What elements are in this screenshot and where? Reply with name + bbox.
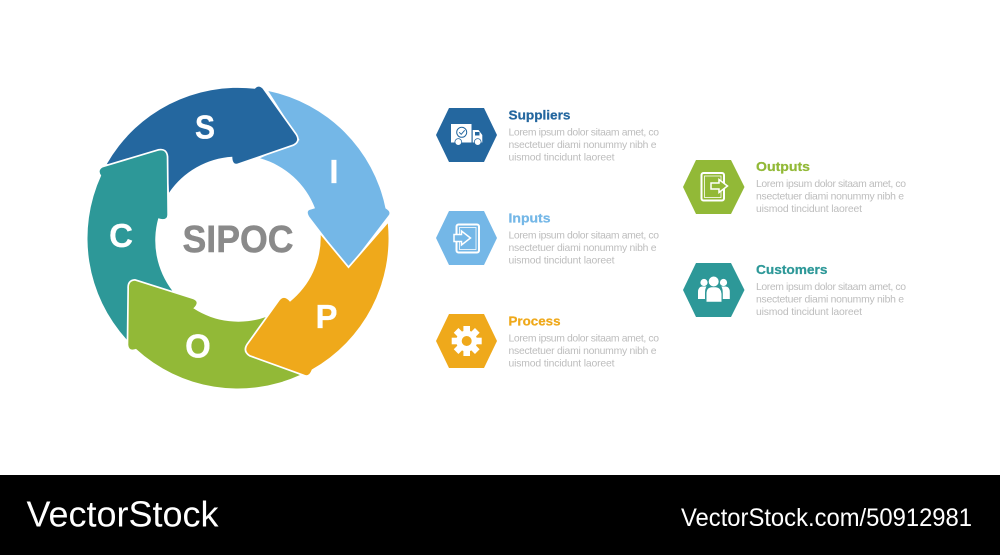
- arrow segment: Customers: [87, 150, 172, 340]
- body text: Lorem ipsum dolor sitaam amet, co: [508, 230, 659, 242]
- heading: Suppliers: Suppliers: [508, 107, 570, 122]
- body text: Lorem ipsum dolor sitaam amet, co: [756, 179, 906, 190]
- heading: Inputs: Inputs: [508, 210, 550, 226]
- letter I: I: [329, 153, 339, 190]
- icon: truck hexagon: [436, 108, 497, 162]
- body text: Lorem ipsum dolor sitaam amet, co: [756, 282, 906, 293]
- SIPOC cycle diagram: [87, 87, 390, 388]
- body text: uismod tincidunt laoreet: [508, 358, 615, 370]
- arrow segment: Inputs: [260, 91, 390, 266]
- arrow segment: Suppliers: [107, 87, 297, 193]
- icon: enter door hexagon: [436, 211, 497, 265]
- body text: uismod tincidunt laoreet: [508, 152, 615, 164]
- icon: gear hexagon: [436, 314, 497, 368]
- body text: uismod tincidunt laoreet: [756, 307, 862, 318]
- body text: Lorem ipsum dolor sitaam amet, co: [508, 128, 659, 138]
- arrow segment: Process: [246, 223, 389, 375]
- letter P: P: [315, 298, 338, 335]
- body text: nsectetuer diami nonummy nibh e: [508, 140, 657, 151]
- letter S: S: [195, 108, 215, 146]
- item: Inputs: [436, 210, 659, 266]
- body text: nsectetuer diami nonummy nibh e: [508, 243, 657, 254]
- heading: Process: Process: [508, 314, 560, 328]
- body text: uismod tincidunt laoreet: [508, 256, 615, 266]
- icon: exit door hexagon: [683, 160, 744, 214]
- letter C: C: [109, 217, 133, 254]
- arrow segment: Outputs: [128, 281, 300, 388]
- footer url text: VectorStock.com/50912981: [681, 504, 972, 532]
- letter O: O: [185, 328, 211, 364]
- heading: Outputs: Outputs: [756, 159, 810, 174]
- footer logo text: VectorStock: [26, 494, 219, 534]
- item: Outputs: [683, 159, 906, 215]
- body text: nsectetuer diami nonummy nibh e: [756, 294, 904, 306]
- body text: uismod tincidunt laoreet: [756, 204, 862, 215]
- heading: Customers: Customers: [756, 262, 828, 277]
- icon: people hexagon: [683, 263, 744, 317]
- item: Customers: [683, 262, 906, 318]
- footer bar: [0, 475, 1000, 555]
- body text: nsectetuer diami nonummy nibh e: [508, 346, 657, 357]
- item: Process: [436, 314, 659, 370]
- center title: SIPOC: [182, 219, 294, 261]
- item: Suppliers: [436, 107, 659, 164]
- body text: Lorem ipsum dolor sitaam amet, co: [508, 334, 659, 344]
- body text: nsectetuer diami nonummy nibh e: [756, 192, 904, 202]
